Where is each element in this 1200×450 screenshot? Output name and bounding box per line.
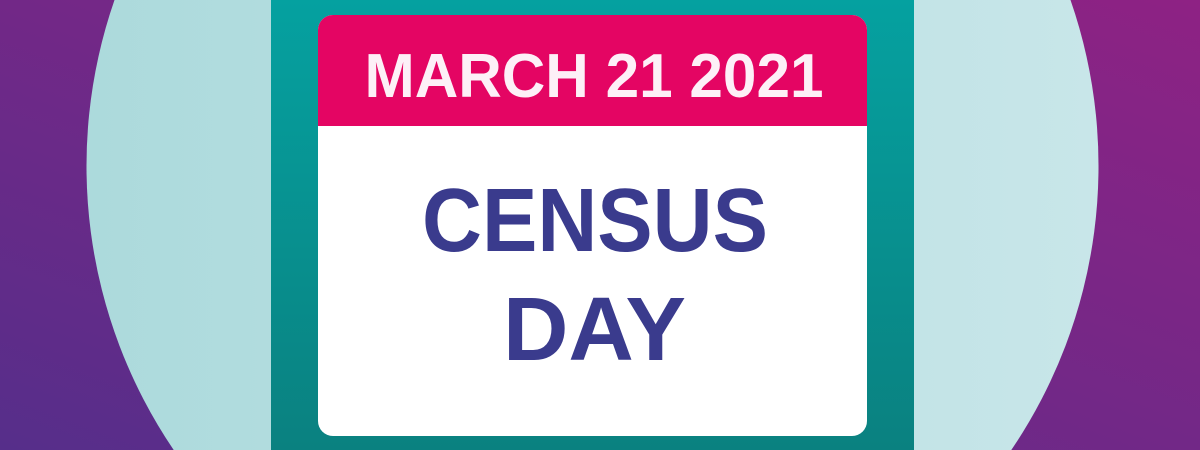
calendar header xyxy=(318,15,867,126)
calendar card xyxy=(318,15,867,436)
teal panel xyxy=(271,0,914,450)
calendar body xyxy=(318,15,867,436)
title line: census: CENSUS xyxy=(422,171,768,271)
title line: day: DAY xyxy=(503,280,686,380)
date heading: MARCH 21 2021 xyxy=(364,42,824,111)
